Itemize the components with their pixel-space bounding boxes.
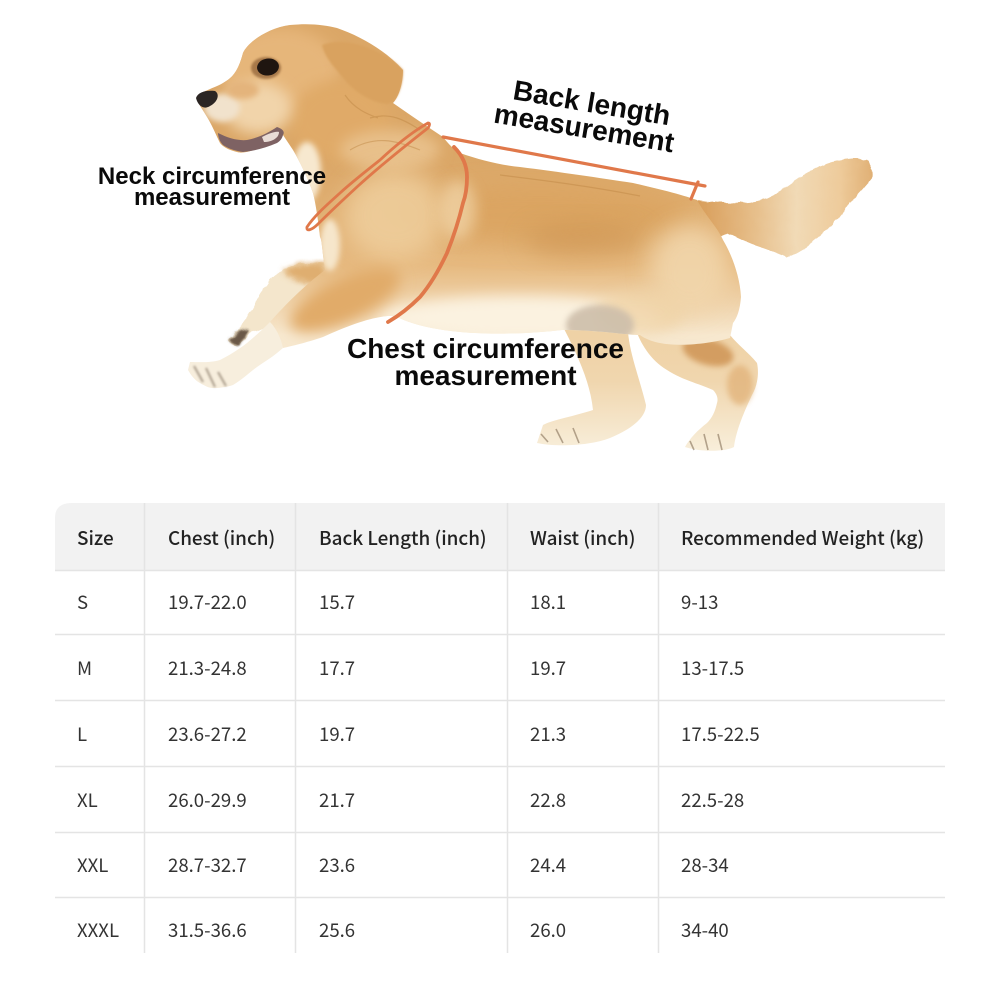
table header row (77, 524, 924, 551)
neck circumference line (307, 123, 430, 230)
dog eye (251, 57, 281, 79)
table header row: Size (77, 524, 114, 551)
label: chest circumference measurement: measurement (394, 360, 577, 391)
row XXL: 28-34 (681, 851, 729, 878)
row M: 21.3-24.8 (168, 654, 247, 681)
chest circumference line (388, 147, 467, 322)
row M: 17.7 (319, 654, 355, 681)
row S: 18.1 (530, 588, 566, 615)
label: neck circumference measurement: measurement (134, 184, 290, 211)
label: back length measurement: measurement (492, 98, 676, 158)
size table (55, 503, 945, 953)
row S (77, 588, 718, 615)
row XXL: 28.7-32.7 (168, 851, 247, 878)
row XXL: 24.4 (530, 851, 566, 878)
row L: 17.5-22.5 (681, 720, 760, 747)
row M: 19.7 (530, 654, 566, 681)
dog illustration (188, 24, 873, 451)
row XL: 26.0-29.9 (168, 786, 247, 813)
dog ear (322, 42, 403, 104)
row L: 19.7 (319, 720, 355, 747)
table header row: Recommended Weight (kg) (681, 524, 924, 551)
row XL: 22.8 (530, 786, 566, 813)
row XXXL: 26.0 (530, 916, 566, 943)
row XXL (77, 851, 729, 878)
row S: 9-13 (681, 588, 718, 615)
row XL: 21.7 (319, 786, 355, 813)
row XXXL: 34-40 (681, 916, 729, 943)
row XXXL (77, 916, 729, 943)
row S: 19.7-22.0 (168, 588, 247, 615)
dog fur shading (204, 28, 730, 345)
table header background (55, 503, 945, 570)
dog mouth (218, 127, 284, 152)
dog nose (196, 91, 218, 108)
row M (77, 654, 744, 681)
table header row: Back Length (inch) (319, 524, 487, 551)
dog hind near leg (636, 325, 758, 451)
row XL: 22.5-28 (681, 786, 744, 813)
row L: L (77, 720, 87, 747)
row S: 15.7 (319, 588, 355, 615)
table grid (55, 503, 945, 953)
row XL (77, 786, 744, 813)
row XXL: XXL (77, 851, 108, 878)
dog near front leg paw (188, 322, 283, 388)
label: back length measurement: Back length (511, 75, 673, 131)
row XXXL: 25.6 (319, 916, 355, 943)
label: chest circumference measurement: Chest circumference (347, 333, 624, 364)
label: neck circumference measurement: Neck circumference (98, 163, 326, 190)
dog far front leg (227, 263, 330, 347)
dog hind far leg (537, 325, 646, 445)
row XL: XL (77, 786, 98, 813)
table header row: Waist (inch) (530, 524, 635, 551)
row M: 13-17.5 (681, 654, 744, 681)
row XXL: 23.6 (319, 851, 355, 878)
row L: 21.3 (530, 720, 566, 747)
row L: 23.6-27.2 (168, 720, 247, 747)
row XXXL: 31.5-36.6 (168, 916, 247, 943)
dog body and head (197, 24, 741, 348)
row S: S (77, 588, 88, 615)
row L (77, 720, 760, 747)
back length line (443, 137, 705, 199)
row XXXL: XXXL (77, 916, 119, 943)
measurement lines (307, 123, 705, 322)
dog tail (697, 159, 873, 257)
table header row: Chest (inch) (168, 524, 275, 551)
row M: M (77, 654, 92, 681)
